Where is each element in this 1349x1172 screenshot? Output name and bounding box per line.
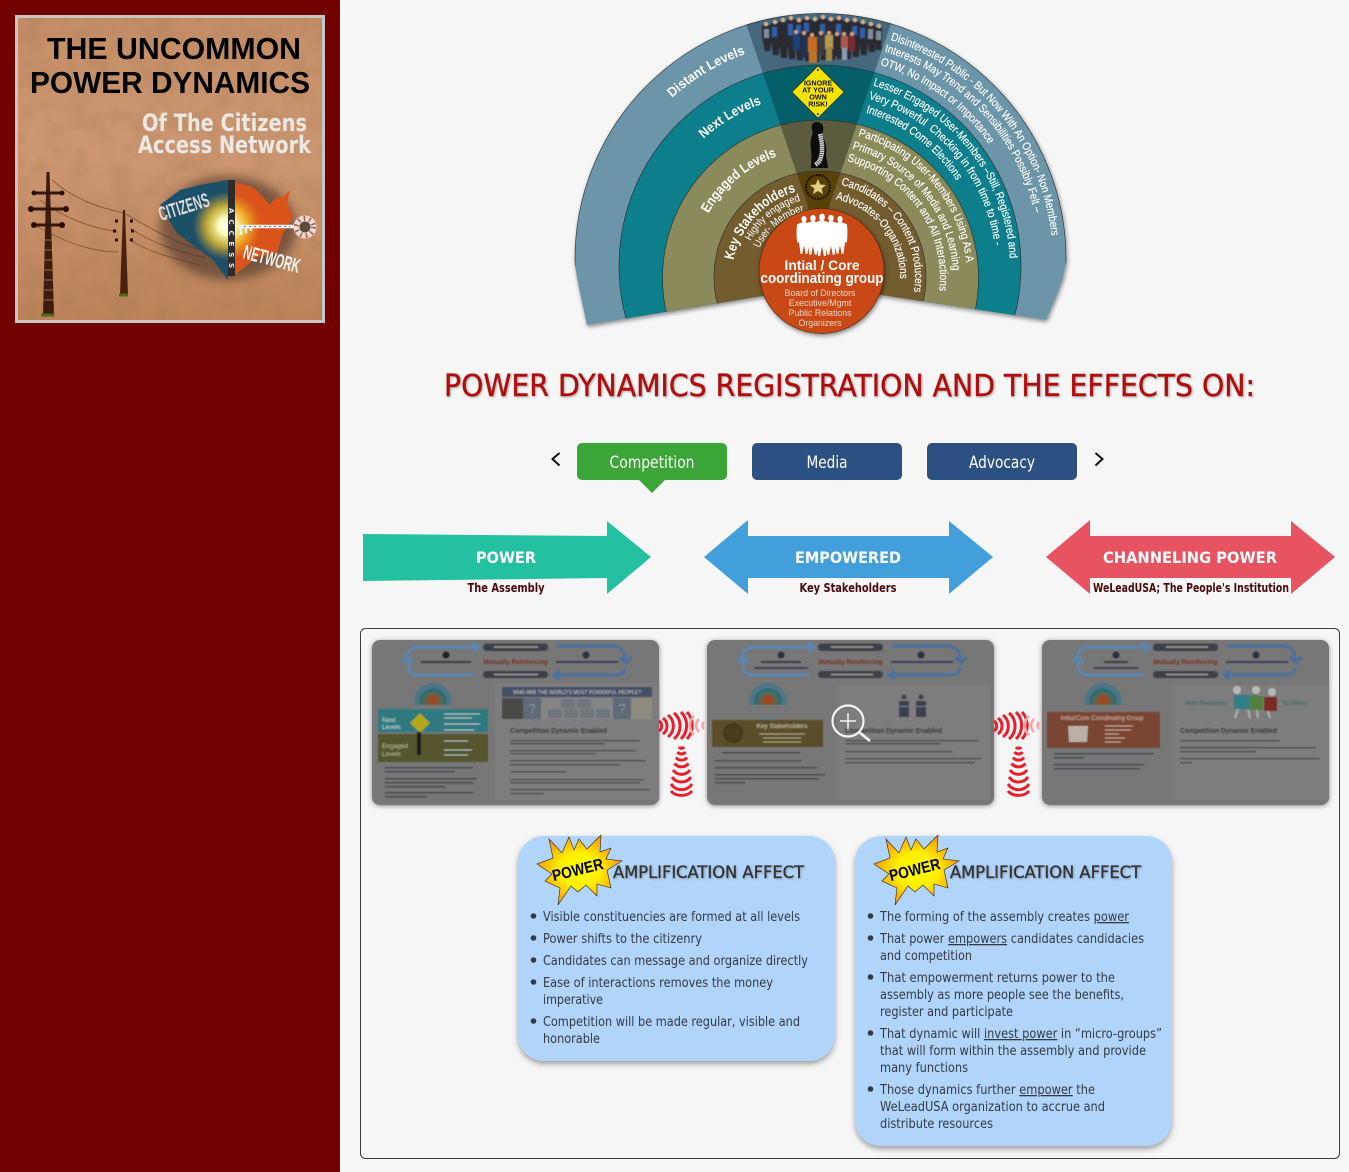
right ring descriptions: Candidates – Content Producers [842, 178, 923, 292]
core labels: Board of Directors [785, 288, 856, 298]
icon: citizens access network map: ACCESS [227, 208, 235, 268]
icon: citizens access network map: CITIZENS [156, 190, 212, 226]
tab: media [752, 443, 902, 480]
bullet list: That power empowers candidates candidacies [879, 932, 1144, 947]
icon: previous chevron [552, 453, 560, 466]
arrow: power [363, 521, 651, 595]
bullet list [531, 910, 808, 1047]
heading: AMPLIFICATION AFFECT [613, 863, 805, 883]
poster subtitle: Access Network [138, 131, 312, 159]
bullet list [868, 910, 1162, 1132]
poster subtitle: Of The Citizens [142, 109, 307, 137]
arrow: power: The Assembly [468, 581, 545, 595]
sidebar [0, 0, 340, 1172]
thumbnail: assembly: Mutually Reinforcing [483, 659, 548, 666]
central wedge [746, 13, 891, 210]
core labels: Intial / Core [784, 257, 860, 273]
poster subtitle [138, 109, 312, 159]
icon: signal waves between thumbnails 1 and 2 [659, 712, 704, 795]
rings [572, 12, 1070, 330]
thumbnail: core group [1042, 640, 1329, 805]
tab: advocacy: Advocacy [969, 453, 1035, 473]
crowd image [762, 15, 882, 63]
bullet list: That dynamic will invest power in “micro-groups” [879, 1027, 1162, 1042]
thumbnail: key stakeholders [707, 640, 994, 805]
bullet list: imperative [543, 993, 603, 1008]
thumbnail: core group: To Direct [1282, 700, 1307, 707]
right ring descriptions [836, 32, 1058, 292]
bullet list: Those dynamics further empower the [879, 1083, 1095, 1098]
tab: advocacy [927, 443, 1077, 480]
tab bar [552, 443, 1102, 493]
icon: magnifier [832, 706, 870, 741]
diagram: power levels fan [572, 12, 1070, 339]
poster: uncommon power dynamics [16, 16, 324, 322]
right ring descriptions: Disinterested Public - But Now With An Option- Non Members [891, 32, 1058, 236]
icon: warning sign: RISK! [808, 100, 828, 108]
panel: amplification affect right [855, 835, 1172, 1146]
bullet list: assembly as more people see the benefits, [880, 988, 1124, 1003]
icon: power starburst: POWER [888, 856, 943, 885]
left ring labels: Engaged Levels [700, 150, 776, 213]
thumbnail: core group: Initial/Core Coordinating Group [1061, 716, 1144, 722]
bullet list: Candidates can message and organize directly [543, 954, 808, 969]
right ring descriptions: Very Powerful Checking in from time to time - [870, 91, 1000, 246]
tab: media: Media [806, 453, 848, 473]
icon: top producer badge [806, 175, 830, 199]
left ring labels: Distant Levels [666, 48, 744, 98]
icon: power starburst [537, 835, 622, 905]
poster title: POWER DYNAMICS [30, 65, 310, 100]
poster title [30, 31, 310, 100]
thumbnail: key stakeholders: Key Stakeholders [757, 723, 808, 730]
right ring descriptions: Primary Source of Media and Learning [852, 141, 960, 270]
key stakeholder sub labels: User- Member [753, 206, 803, 247]
thumbnail: key stakeholders: Mutually Reinforcing [818, 659, 883, 666]
core labels: Organizers [798, 318, 842, 328]
key stakeholder sub labels: Highly engaged [744, 194, 800, 240]
arrow: channeling power [1046, 520, 1335, 595]
thumbnail: key stakeholders: Competition Dynamic Enabled [845, 728, 942, 735]
right ring descriptions: Advocates-Organizations [836, 192, 907, 278]
thumbnail: assembly: Levels [382, 751, 402, 758]
core labels: Executive/Mgmt [789, 298, 852, 308]
thumbnail: assembly: ? [528, 701, 536, 716]
thumbnail: assembly: Competition Dynamic Enabled [510, 728, 607, 735]
thumbnail: core group: More Resources [1185, 700, 1228, 707]
thumbnail: assembly: Engaged [382, 743, 408, 750]
bullet list: Ease of interactions removes the money [543, 976, 773, 991]
bullet list: many functions [880, 1061, 968, 1076]
thumbnail: core group: Mutually Reinforcing [1153, 659, 1218, 666]
bullet list: and competition [880, 949, 972, 964]
bullet list: That empowerment returns power to the [879, 971, 1115, 986]
icon: citizens access network map [156, 176, 314, 280]
bullet list: honorable [543, 1032, 600, 1047]
arrow: empowered: EMPOWERED [795, 548, 901, 567]
core labels: Public Relations [788, 308, 852, 318]
bullet list: Visible constituencies are formed at all levels [543, 910, 800, 925]
bullet list: The forming of the assembly creates power [879, 910, 1130, 925]
icon: next chevron [1096, 453, 1102, 466]
arrow: power: POWER [476, 548, 536, 567]
arrow: channeling power: CHANNELING POWER [1103, 548, 1277, 567]
bullet list: Power shifts to the citizenry [543, 932, 702, 947]
bullet list: that will form within the assembly and provide [880, 1044, 1146, 1059]
thumbnail: core group: Competition Dynamic Enabled [1180, 728, 1277, 735]
poster title: THE UNCOMMON [47, 31, 301, 66]
icon: signal waves between thumbnails 2 and 3 [994, 712, 1039, 795]
icon: power poles [28, 172, 205, 315]
arrow: channeling power: WeLeadUSA; The People's Institution [1093, 581, 1289, 595]
bullet list: WeLeadUSA organization to accrue and [880, 1100, 1105, 1115]
arrow: empowered [704, 520, 993, 595]
right ring descriptions: Lesser Engaged User-Members –Still, Registered and [874, 78, 1018, 258]
arrow: empowered: Key Stakeholders [800, 581, 896, 595]
thumbnail: assembly: Next [382, 717, 396, 724]
thumbnail: assembly [372, 640, 659, 805]
tab: competition: Competition [610, 453, 694, 473]
right ring descriptions: Interests May Trend and Sensibilities Possibly Felt – [885, 44, 1040, 213]
thumbnail: assembly: WHO ARE THE WORLD'S MOST POWERFUL PEOPLE? [513, 690, 641, 696]
bullet list: Competition will be made regular, visible and [543, 1015, 800, 1030]
left ring labels: Key Stakeholders [724, 185, 795, 260]
right ring descriptions: Supporting Content and All Interactions [848, 154, 948, 291]
icon: core group silhouettes [797, 214, 847, 256]
icon: warning sign [792, 66, 844, 118]
icon: spine silhouette [811, 122, 828, 168]
heading: AMPLIFICATION AFFECT [950, 863, 1142, 883]
icon: power starburst: POWER [551, 856, 606, 885]
icon: warning sign: OWN [809, 92, 827, 102]
core circle [759, 208, 884, 334]
icon: power starburst [874, 835, 959, 905]
right ring descriptions: Interested Come Elections [866, 105, 961, 180]
thumbnail: assembly: ? [618, 701, 626, 716]
left ring labels [666, 48, 795, 260]
right ring descriptions: Participating User-Members Using As A [858, 128, 974, 263]
icon: warning sign: IGNORE [804, 78, 832, 88]
tab: competition [577, 443, 727, 493]
panel: content frame [360, 628, 1340, 1158]
panel: amplification affect left [518, 835, 835, 1061]
left ring labels: Next Levels [698, 98, 761, 138]
icon: citizens access network map: NETWORK [241, 242, 303, 278]
bullet list: distribute resources [880, 1117, 993, 1132]
main heading: POWER DYNAMICS REGISTRATION AND THE EFFECTS ON: [444, 369, 1255, 404]
bullet list: register and participate [880, 1005, 1013, 1020]
core labels: coordinating group [760, 271, 884, 287]
icon: warning sign: AT YOUR [802, 86, 835, 94]
core labels [760, 257, 884, 328]
right ring descriptions: OTW, No Impact or Importance [881, 58, 993, 144]
thumbnail: assembly: Levels [382, 724, 402, 731]
